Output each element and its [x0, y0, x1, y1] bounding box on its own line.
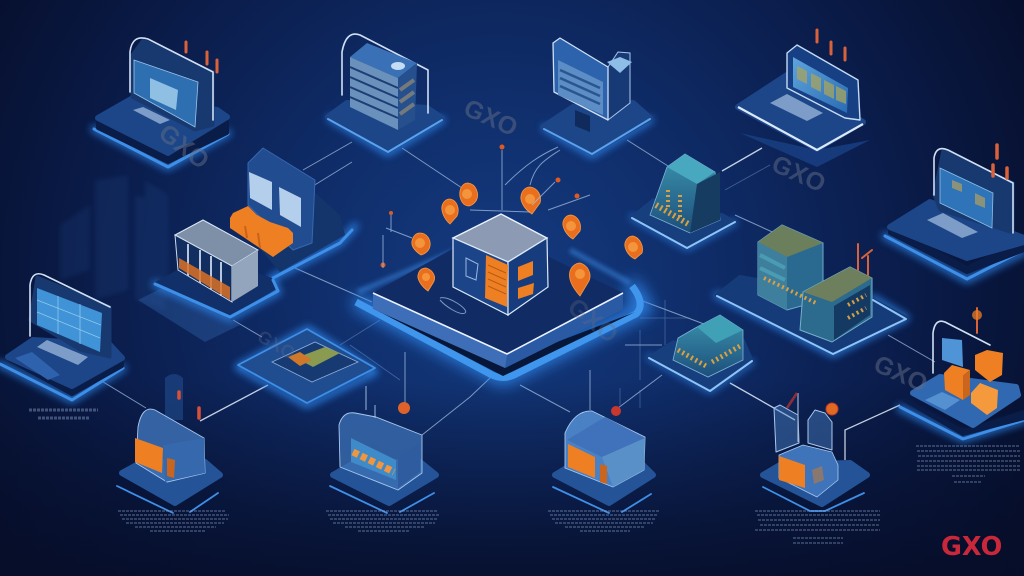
text block: unit one caption: [118, 511, 229, 531]
pin: [418, 268, 435, 291]
watermark: GXO: [870, 350, 932, 398]
text block: unit four caption: [755, 511, 881, 543]
device: left servers with orange boxes: [230, 148, 355, 278]
watermarks: [153, 94, 932, 398]
dotted floor grid: [138, 285, 240, 342]
device: bottom unit three: [553, 388, 653, 513]
pin: [521, 187, 541, 214]
text block: right caption: [916, 446, 1020, 482]
device: upper small building: [632, 154, 735, 248]
watermark: GXO: [254, 326, 299, 363]
laptop reflection: [740, 133, 870, 167]
pin: [625, 236, 643, 259]
hub soft glow: [355, 283, 645, 378]
hub glow rim: [356, 286, 640, 378]
device: bottom unit four: [763, 393, 867, 511]
text block: left laptop caption: [29, 410, 98, 418]
faded city silhouette: [60, 175, 168, 310]
device: chip board: [238, 329, 375, 405]
device: small building lower right: [649, 315, 752, 391]
orange boxes: [230, 206, 293, 257]
watermark: GXO: [460, 94, 522, 142]
watermark: GXO: [768, 150, 830, 198]
central cube: [453, 214, 548, 315]
pin: [412, 233, 430, 255]
text block: unit two caption: [326, 511, 440, 531]
device: top server: [328, 34, 442, 153]
pin: [442, 199, 458, 224]
hub top: [373, 228, 623, 353]
text block: unit three caption: [548, 511, 660, 531]
pin: [569, 263, 590, 296]
device: left rack: [155, 220, 278, 318]
device: bottom unit two: [330, 386, 436, 513]
device: bottom unit one: [117, 374, 220, 513]
pins around hub: [380, 144, 643, 296]
watermark: GXO: [153, 119, 214, 175]
hub side faces: [373, 293, 623, 368]
device: right laptop: [885, 145, 1024, 280]
pin: [563, 215, 581, 239]
hub back arc: [358, 250, 630, 292]
cube side labels: [518, 261, 533, 281]
hub shadow: [372, 308, 635, 376]
cube orange door: [485, 255, 508, 307]
panel: central hub: [355, 214, 645, 378]
device: left laptop: [0, 274, 123, 400]
device: right orange boxes: [900, 308, 1024, 439]
pin: [460, 183, 478, 206]
connector lines: [100, 140, 935, 460]
logo: GXO: GXO: [941, 532, 1002, 562]
device: top-left laptop: [94, 38, 228, 167]
device: top-right laptop: [738, 30, 870, 167]
watermark: GXO: [562, 293, 623, 349]
device: right-centre buildings: [717, 225, 906, 354]
device: top monitor: [543, 38, 650, 155]
